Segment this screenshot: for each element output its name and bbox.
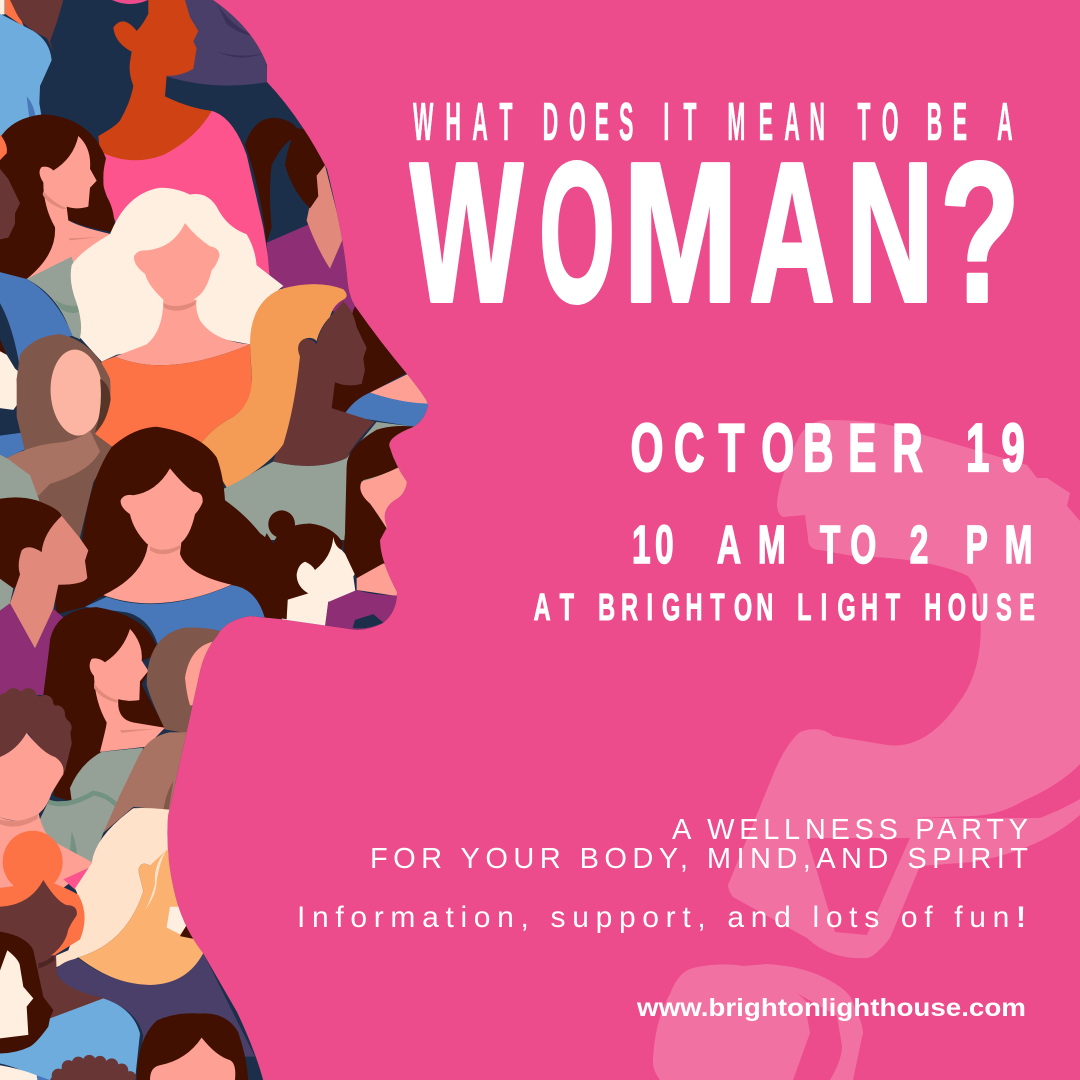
figure: second hijab woman xyxy=(103,627,227,833)
figure: woman with bun xyxy=(253,510,358,627)
figure: lower-left sage xyxy=(0,454,40,502)
heading: woman: N xyxy=(846,122,934,344)
figure: woman in purple headscarf xyxy=(167,0,268,86)
website url: www.brightonlighthouse.com xyxy=(636,994,1026,1022)
figure: woman in brown hijab xyxy=(7,334,113,551)
date: october 19: OCTOBER 19 xyxy=(631,410,1025,485)
figure: curly-haired woman xyxy=(0,688,92,902)
heading: woman: M xyxy=(623,122,738,344)
time: 10 am to 2 pm: 10 AM TO 2 PM xyxy=(632,514,1033,575)
figure: woman with salmon skin and plum top xyxy=(0,497,88,695)
figure: woman in blue top xyxy=(55,427,290,654)
figure: dark-skinned woman with golden hair xyxy=(200,284,430,487)
figure: woman with ponytail and purple top xyxy=(245,118,357,320)
figure: hot pink body xyxy=(103,110,270,276)
tagline: for your body, mind, and spirit: FOR YOUR BODY, MIND,AND SPIRIT xyxy=(370,843,1028,875)
heading: woman: A xyxy=(749,122,835,344)
heading: woman: W xyxy=(410,122,523,344)
tagline: a wellness party: A WELLNESS PARTY xyxy=(672,814,1028,846)
figure: top-left women xyxy=(0,0,63,138)
heading: woman: ? xyxy=(940,122,1020,344)
illustration: silhouette of women xyxy=(0,0,440,1080)
figure: central blonde woman xyxy=(71,188,283,448)
icon: question mark watermark xyxy=(653,420,1080,1080)
figure: lower right sage area xyxy=(223,422,417,540)
figure: woman with rust skin xyxy=(98,0,212,160)
figure: bottom women xyxy=(0,932,248,1080)
title line: what does it mean to be a: WHAT DOES IT MEAN TO BE A xyxy=(413,91,1013,152)
figure: woman in sage top xyxy=(38,607,165,865)
description: information, support, and lots of fun: Information, support, and lots of fun! xyxy=(297,901,1026,934)
figure: profile woman on right xyxy=(325,426,423,630)
figure: woman with dark hair top left xyxy=(0,114,114,458)
figure: woman with orange hair xyxy=(0,830,106,1018)
figure: lower blonde woman xyxy=(53,808,268,1080)
location: at brighton light house: AT BRIGHTON LIGHT HOUSE xyxy=(534,585,1035,628)
heading: woman: O xyxy=(539,122,615,344)
